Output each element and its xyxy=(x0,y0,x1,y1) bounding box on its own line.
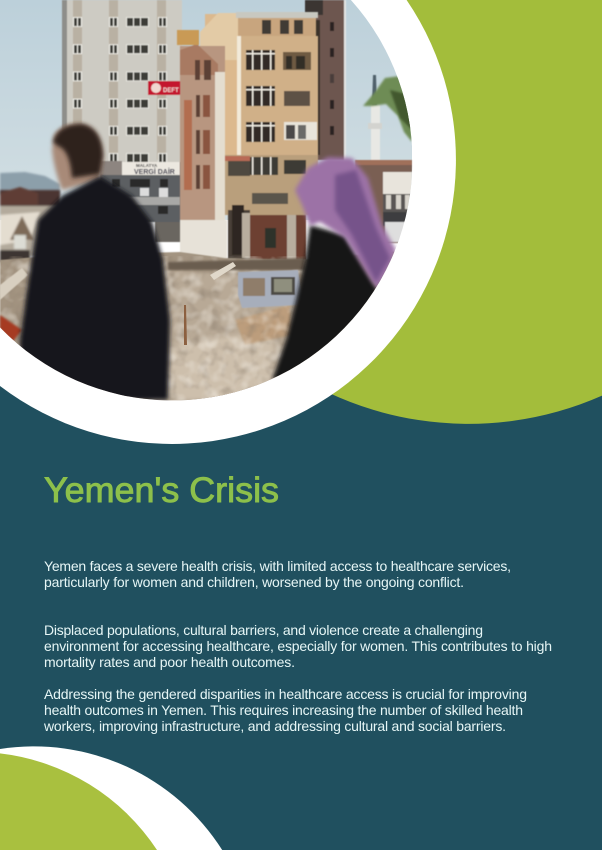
low buildings on right xyxy=(355,160,412,243)
left low roofs xyxy=(0,187,60,262)
ground floor: dark brick and door xyxy=(228,210,250,260)
white office sign: VERGİ DAİR xyxy=(134,168,175,176)
lower floors of tower xyxy=(100,162,182,222)
man seen from behind xyxy=(20,124,170,400)
grey tower block xyxy=(62,0,182,242)
woman in purple headscarf xyxy=(272,157,396,380)
white ring behind photo xyxy=(0,0,456,444)
white office sign xyxy=(122,162,180,176)
paragraph 1: Yemen faces a severe health crisis, with limited access to healthcare services, xyxy=(44,558,511,574)
red sign: DEFT xyxy=(163,88,179,94)
rubble field xyxy=(0,250,410,400)
ruined brick wall xyxy=(177,30,227,258)
paragraph 2: mortality rates and poor health outcomes. xyxy=(44,654,295,670)
paragraph 1: particularly for women and children, worsened by the ongoing conflict. xyxy=(44,574,464,590)
green circle top right xyxy=(138,0,602,424)
title: Yemen's Crisis xyxy=(44,471,279,510)
sky xyxy=(0,0,412,220)
minaret xyxy=(368,75,382,165)
purple scarf xyxy=(295,157,396,290)
paragraph 3: health outcomes in Yemen. This requires increasing the number of skilled health xyxy=(44,702,523,718)
paragraph 2 xyxy=(44,622,552,670)
photo: two people facing ruined buildings xyxy=(0,0,412,400)
beige apartment building xyxy=(200,12,318,260)
tree xyxy=(363,76,412,142)
dark jacket xyxy=(20,176,170,400)
wrecked van xyxy=(238,270,302,308)
paragraph 2: Displaced populations, cultural barriers, and violence create a challenging xyxy=(44,622,483,638)
paragraph 1 xyxy=(44,558,511,590)
paragraph 2: environment for accessing healthcare, especially for women. This contributes to high xyxy=(44,638,552,654)
head xyxy=(52,124,103,190)
white office sign: MALATYA xyxy=(136,163,158,168)
bottom-left white circle xyxy=(0,746,222,850)
paragraph 3: Addressing the gendered disparities in healthcare access is crucial for improving xyxy=(44,686,527,702)
dark brown tower behind xyxy=(305,0,346,160)
red sign xyxy=(148,81,182,95)
paragraph 3 xyxy=(43,686,527,734)
bottom-left green circle xyxy=(0,753,157,850)
distant hills xyxy=(0,172,60,195)
paragraph 3: workers, improving infrastructure, and addressing cultural and social barriers. xyxy=(43,718,506,734)
black coat xyxy=(272,225,378,380)
